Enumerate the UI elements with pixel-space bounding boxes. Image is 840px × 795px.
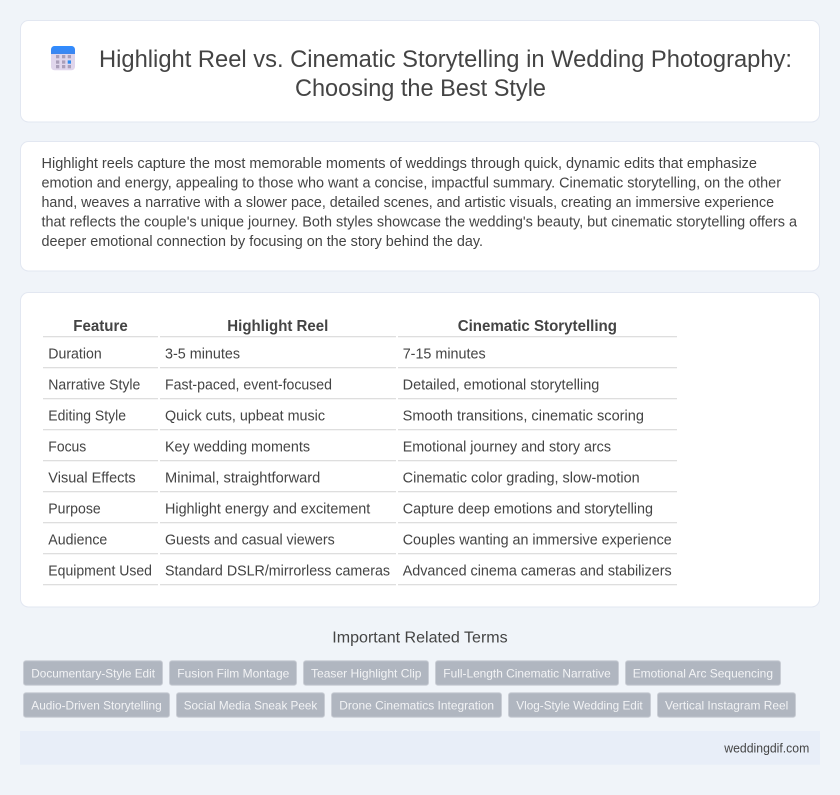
title: Highlight Reel vs. Cinematic Storytelling in Wedding Photography:: [99, 46, 792, 73]
table header: Highlight Reel: [227, 318, 328, 335]
tags: related terms: [24, 661, 796, 717]
text block: introduction paragraph: that reflects the couple's unique journey. Both styles showcase the wedding's beauty, but cinematic storytelling offers a: [42, 214, 797, 230]
footer: weddingdif.com: [723, 740, 809, 755]
table header: [73, 318, 617, 335]
row: editing style: [48, 408, 644, 424]
text block: introduction paragraph: emotion and energy, appealing to those who want a concise, impactful summary. Cinematic storytelling, on the other: [42, 176, 781, 192]
text block: introduction paragraph: Highlight reels capture the most memorable moments of weddings through quick, dynamic edits that emphasize: [42, 156, 757, 172]
tags: related terms: Vertical Instagram Reel: [665, 698, 788, 712]
panel: introduction: [20, 142, 820, 271]
row: audience: Couples wanting an immersive experience: [403, 532, 672, 548]
row: duration: Duration: [48, 346, 102, 362]
row: equipment used: [48, 563, 672, 579]
tags: related terms: Social Media Sneak Peek: [184, 698, 318, 712]
tags: related terms: Fusion Film Montage: [177, 666, 290, 680]
tags: related terms: Teaser Highlight Clip: [311, 666, 422, 680]
row: audience: Audience: [48, 532, 107, 548]
tags: related terms: Full-Length Cinematic Narrative: [443, 666, 611, 680]
text block: introduction paragraph: [42, 156, 797, 250]
row: editing style: Smooth transitions, cinematic scoring: [403, 408, 644, 424]
footer: [20, 731, 820, 765]
row: editing style: Editing Style: [48, 408, 126, 424]
row: equipment used: Standard DSLR/mirrorless cameras: [165, 563, 390, 579]
title: [99, 46, 792, 102]
table row lines: [43, 336, 677, 585]
row: audience: [48, 532, 672, 548]
tags: related terms: Audio-Driven Storytelling: [31, 698, 162, 712]
text block: introduction paragraph: deeper emotional connection by focusing on the story behind the day.: [42, 234, 483, 250]
table header: Feature: [73, 318, 128, 335]
tags: related terms: Emotional Arc Sequencing: [633, 666, 773, 680]
row: narrative style: [48, 377, 599, 393]
row: purpose: [48, 501, 653, 517]
row: visual effects: Minimal, straightforward: [165, 470, 320, 486]
row: narrative style: Detailed, emotional storytelling: [403, 377, 599, 393]
row: audience: Guests and casual viewers: [165, 532, 335, 548]
row: visual effects: Visual Effects: [48, 470, 136, 486]
row: equipment used: Advanced cinema cameras and stabilizers: [403, 563, 672, 579]
heading: important related terms: Important Related Terms: [332, 630, 508, 647]
row: focus: Focus: [48, 439, 86, 455]
row: editing style: Quick cuts, upbeat music: [165, 408, 325, 424]
row: purpose: Capture deep emotions and storytelling: [403, 501, 653, 517]
row: equipment used: Equipment Used: [48, 563, 152, 579]
tags: related terms: Documentary-Style Edit: [31, 666, 156, 680]
tags: related terms: Drone Cinematics Integration: [339, 698, 494, 712]
row: duration: 7-15 minutes: [403, 346, 486, 362]
icon: calendar: [51, 46, 75, 70]
row: visual effects: Cinematic color grading, slow-motion: [403, 470, 640, 486]
row: focus: Emotional journey and story arcs: [403, 439, 611, 455]
row: duration: 3-5 minutes: [165, 346, 240, 362]
row: duration: [48, 346, 486, 362]
row: visual effects: [48, 470, 640, 486]
tags: related terms: Vlog-Style Wedding Edit: [516, 698, 643, 712]
row: focus: [48, 439, 611, 455]
panel: header: [20, 20, 820, 122]
row: narrative style: Narrative Style: [48, 377, 140, 393]
row: purpose: Highlight energy and excitement: [165, 501, 370, 517]
table header: Cinematic Storytelling: [458, 318, 617, 335]
row: purpose: Purpose: [48, 501, 101, 517]
row: focus: Key wedding moments: [165, 439, 310, 455]
panel: comparison table: [20, 292, 820, 607]
row: narrative style: Fast-paced, event-focused: [165, 377, 332, 393]
text block: introduction paragraph: hand, weaves a narrative with a slower pace, detailed scenes, and artistic visuals, creating an immersive experience: [42, 195, 774, 211]
title: Choosing the Best Style: [295, 75, 546, 102]
